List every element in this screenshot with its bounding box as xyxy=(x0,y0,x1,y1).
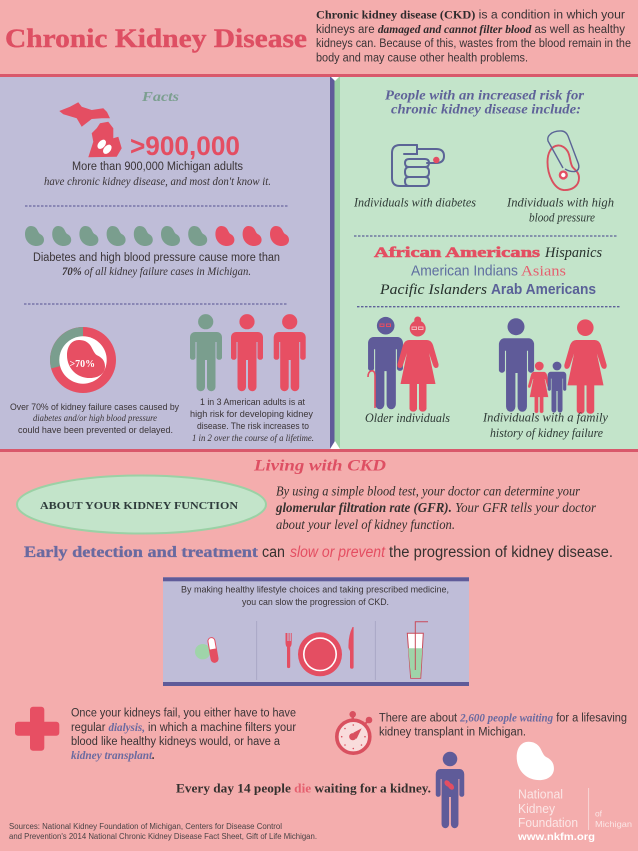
text block: lifestyle: By making healthy lifestyle choices and taking prescribed medicine, xyxy=(181,585,449,596)
icon: older couple xyxy=(368,316,439,412)
text block: sources: Sources: National Kidney Foundation of Michigan, Centers for Disease Control xyxy=(9,822,282,831)
text block: one in three adults: 1 in 3 American adults is at xyxy=(200,397,305,408)
panel: header xyxy=(0,0,638,77)
statement: early detection: the progression of kidney disease. xyxy=(389,544,613,561)
text block: one in three adults xyxy=(190,397,314,443)
text block: ethnic groups: American Indians xyxy=(411,263,518,280)
text block: prevented or delayed: Over 70% of kidney failure cases caused by xyxy=(10,402,179,413)
heading: increased risk: People with an increased risk for xyxy=(385,88,585,102)
text block: GFR explanation xyxy=(275,484,597,532)
statement: early detection: can xyxy=(262,544,285,561)
statement: every day: Every day 14 people die waiting for a kidney. xyxy=(176,781,431,795)
text block: ethnic groups: Hispanics xyxy=(544,245,602,261)
logo: National Kidney Foundation of Michigan: Foundation xyxy=(518,816,578,830)
text block: people waiting xyxy=(379,713,627,739)
icon: person with kidneys xyxy=(436,752,464,828)
logo: National Kidney Foundation of Michigan: of xyxy=(595,810,603,819)
icon: plate and cutlery xyxy=(286,627,354,676)
text block: 70% of kidney failure: Diabetes and high blood pressure cause more than xyxy=(33,252,280,264)
label: family history: Individuals with a family xyxy=(482,411,608,425)
text block: definition of CKD: body and may cause other health problems. xyxy=(316,52,528,64)
text block: 70% of kidney failure: 70% of all kidney failure cases in Michigan. xyxy=(62,264,251,278)
text block: sources: and Prevention's 2014 National Chronic Kidney Disease Fact Sheet, Gift of Life Michigan. xyxy=(9,832,317,841)
text block: people waiting: kidney transplant in Michigan. xyxy=(379,727,526,739)
statement: early detection xyxy=(24,544,613,561)
icon: red cross xyxy=(15,707,59,751)
text block: definition of CKD: Chronic kidney disease (CKD) is a condition in which your xyxy=(316,10,625,22)
label: high blood pressure: Individuals with high xyxy=(506,196,614,210)
heading: facts: Facts xyxy=(141,90,180,105)
icon: pills xyxy=(195,637,219,663)
icon: finger prick xyxy=(392,145,444,186)
text block: ethnic groups: Pacific Islanders xyxy=(379,282,487,298)
text block: definition of CKD: kidneys are damaged and cannot filter blood as well as healthy xyxy=(316,24,625,36)
text block: sources xyxy=(9,822,317,841)
logo: National Kidney Foundation of Michigan: Kidney xyxy=(518,802,556,816)
text block: Michigan adults: have chronic kidney disease, and most don't know it. xyxy=(44,174,271,188)
panel: healthy lifestyle xyxy=(163,577,469,686)
text block: ethnic groups: African Americans xyxy=(374,245,540,261)
text block: dialysis or transplant xyxy=(71,708,296,762)
label: family history xyxy=(482,411,608,440)
text block: dialysis or transplant: blood like healthy kidneys would, or have a xyxy=(71,736,281,748)
text block: one in three adults: 1 in 2 over the course of a lifetime. xyxy=(192,433,314,443)
panel: facts xyxy=(0,77,330,449)
title: Chronic Kidney Disease xyxy=(5,24,307,53)
statement: early detection: slow or prevent xyxy=(290,544,386,561)
text block: prevented or delayed: could have been prevented or delayed. xyxy=(18,425,173,436)
text block: lifestyle: you can slow the progression of CKD. xyxy=(242,597,389,608)
text block: Michigan adults xyxy=(44,161,271,188)
logo: National Kidney Foundation of Michigan: Michigan xyxy=(595,820,632,829)
logo: National Kidney Foundation of Michigan: National xyxy=(518,787,563,801)
text block: GFR explanation: By using a simple blood test, your doctor can determine your xyxy=(276,484,581,499)
text block: GFR explanation: about your level of kidney function. xyxy=(276,517,455,532)
icon: family xyxy=(499,318,607,414)
text block: ethnic groups: Arab Americans xyxy=(491,281,596,298)
icon: stethoscope xyxy=(548,131,579,190)
label: high blood pressure: blood pressure xyxy=(529,210,595,224)
label: family history: history of kidney failure xyxy=(490,426,603,440)
text block: one in three adults: disease. The risk increases to xyxy=(197,421,309,432)
label: high blood pressure xyxy=(506,196,614,224)
heading: living with CKD: Living with CKD xyxy=(253,458,387,475)
text block: definition of CKD xyxy=(316,10,631,64)
chart: donut over 70 percent xyxy=(50,327,116,393)
text block: prevented or delayed xyxy=(10,402,179,436)
label: older individuals: Older individuals xyxy=(365,411,450,425)
panel: living with CKD xyxy=(0,449,638,561)
statement: early detection: Early detection and treatment xyxy=(24,544,259,561)
text block: ethnic groups: Asians xyxy=(521,264,566,280)
logo: National Kidney Foundation of Michigan xyxy=(517,742,632,843)
icon: Michigan map xyxy=(59,102,122,157)
text block: ethnic groups xyxy=(374,245,602,298)
panel: increased risk xyxy=(330,77,638,449)
text block: 70% of kidney failure xyxy=(33,252,280,278)
text block: dialysis or transplant: Once your kidneys fail, you either have to have xyxy=(71,708,296,720)
callout: about your kidney function: ABOUT YOUR KIDNEY FUNCTION xyxy=(40,500,238,512)
icon: three people, one in three xyxy=(190,314,306,391)
text block: one in three adults: high risk for developing kidney xyxy=(190,409,313,420)
label: diabetes: Individuals with diabetes xyxy=(353,196,476,210)
text block: prevented or delayed: diabetes and/or high blood pressure xyxy=(33,413,157,423)
heading: increased risk: chronic kidney disease include: xyxy=(391,102,581,116)
text block: dialysis or transplant: kidney transplant. xyxy=(71,750,155,762)
big number: 900,000: >900,000 xyxy=(130,131,240,161)
text block: people waiting: There are about 2,600 people waiting for a lifesaving xyxy=(379,713,627,725)
icon: glass of water xyxy=(407,622,428,678)
icon: stopwatch xyxy=(337,711,372,753)
text block: Michigan adults: More than 900,000 Michigan adults xyxy=(72,161,243,173)
callout: about your kidney function xyxy=(17,476,266,534)
donut label: >70% xyxy=(70,359,95,370)
heading: increased risk xyxy=(385,88,585,116)
text block: GFR explanation: glomerular filtration rate (GFR). Your GFR tells your doctor xyxy=(275,500,597,515)
text block: dialysis or transplant: regular dialysis, in which a machine filters your xyxy=(71,722,296,734)
icon row: ten kidneys xyxy=(25,226,289,246)
text block: lifestyle xyxy=(181,585,449,608)
logo: National Kidney Foundation of Michigan: www.nkfm.org xyxy=(517,831,595,843)
